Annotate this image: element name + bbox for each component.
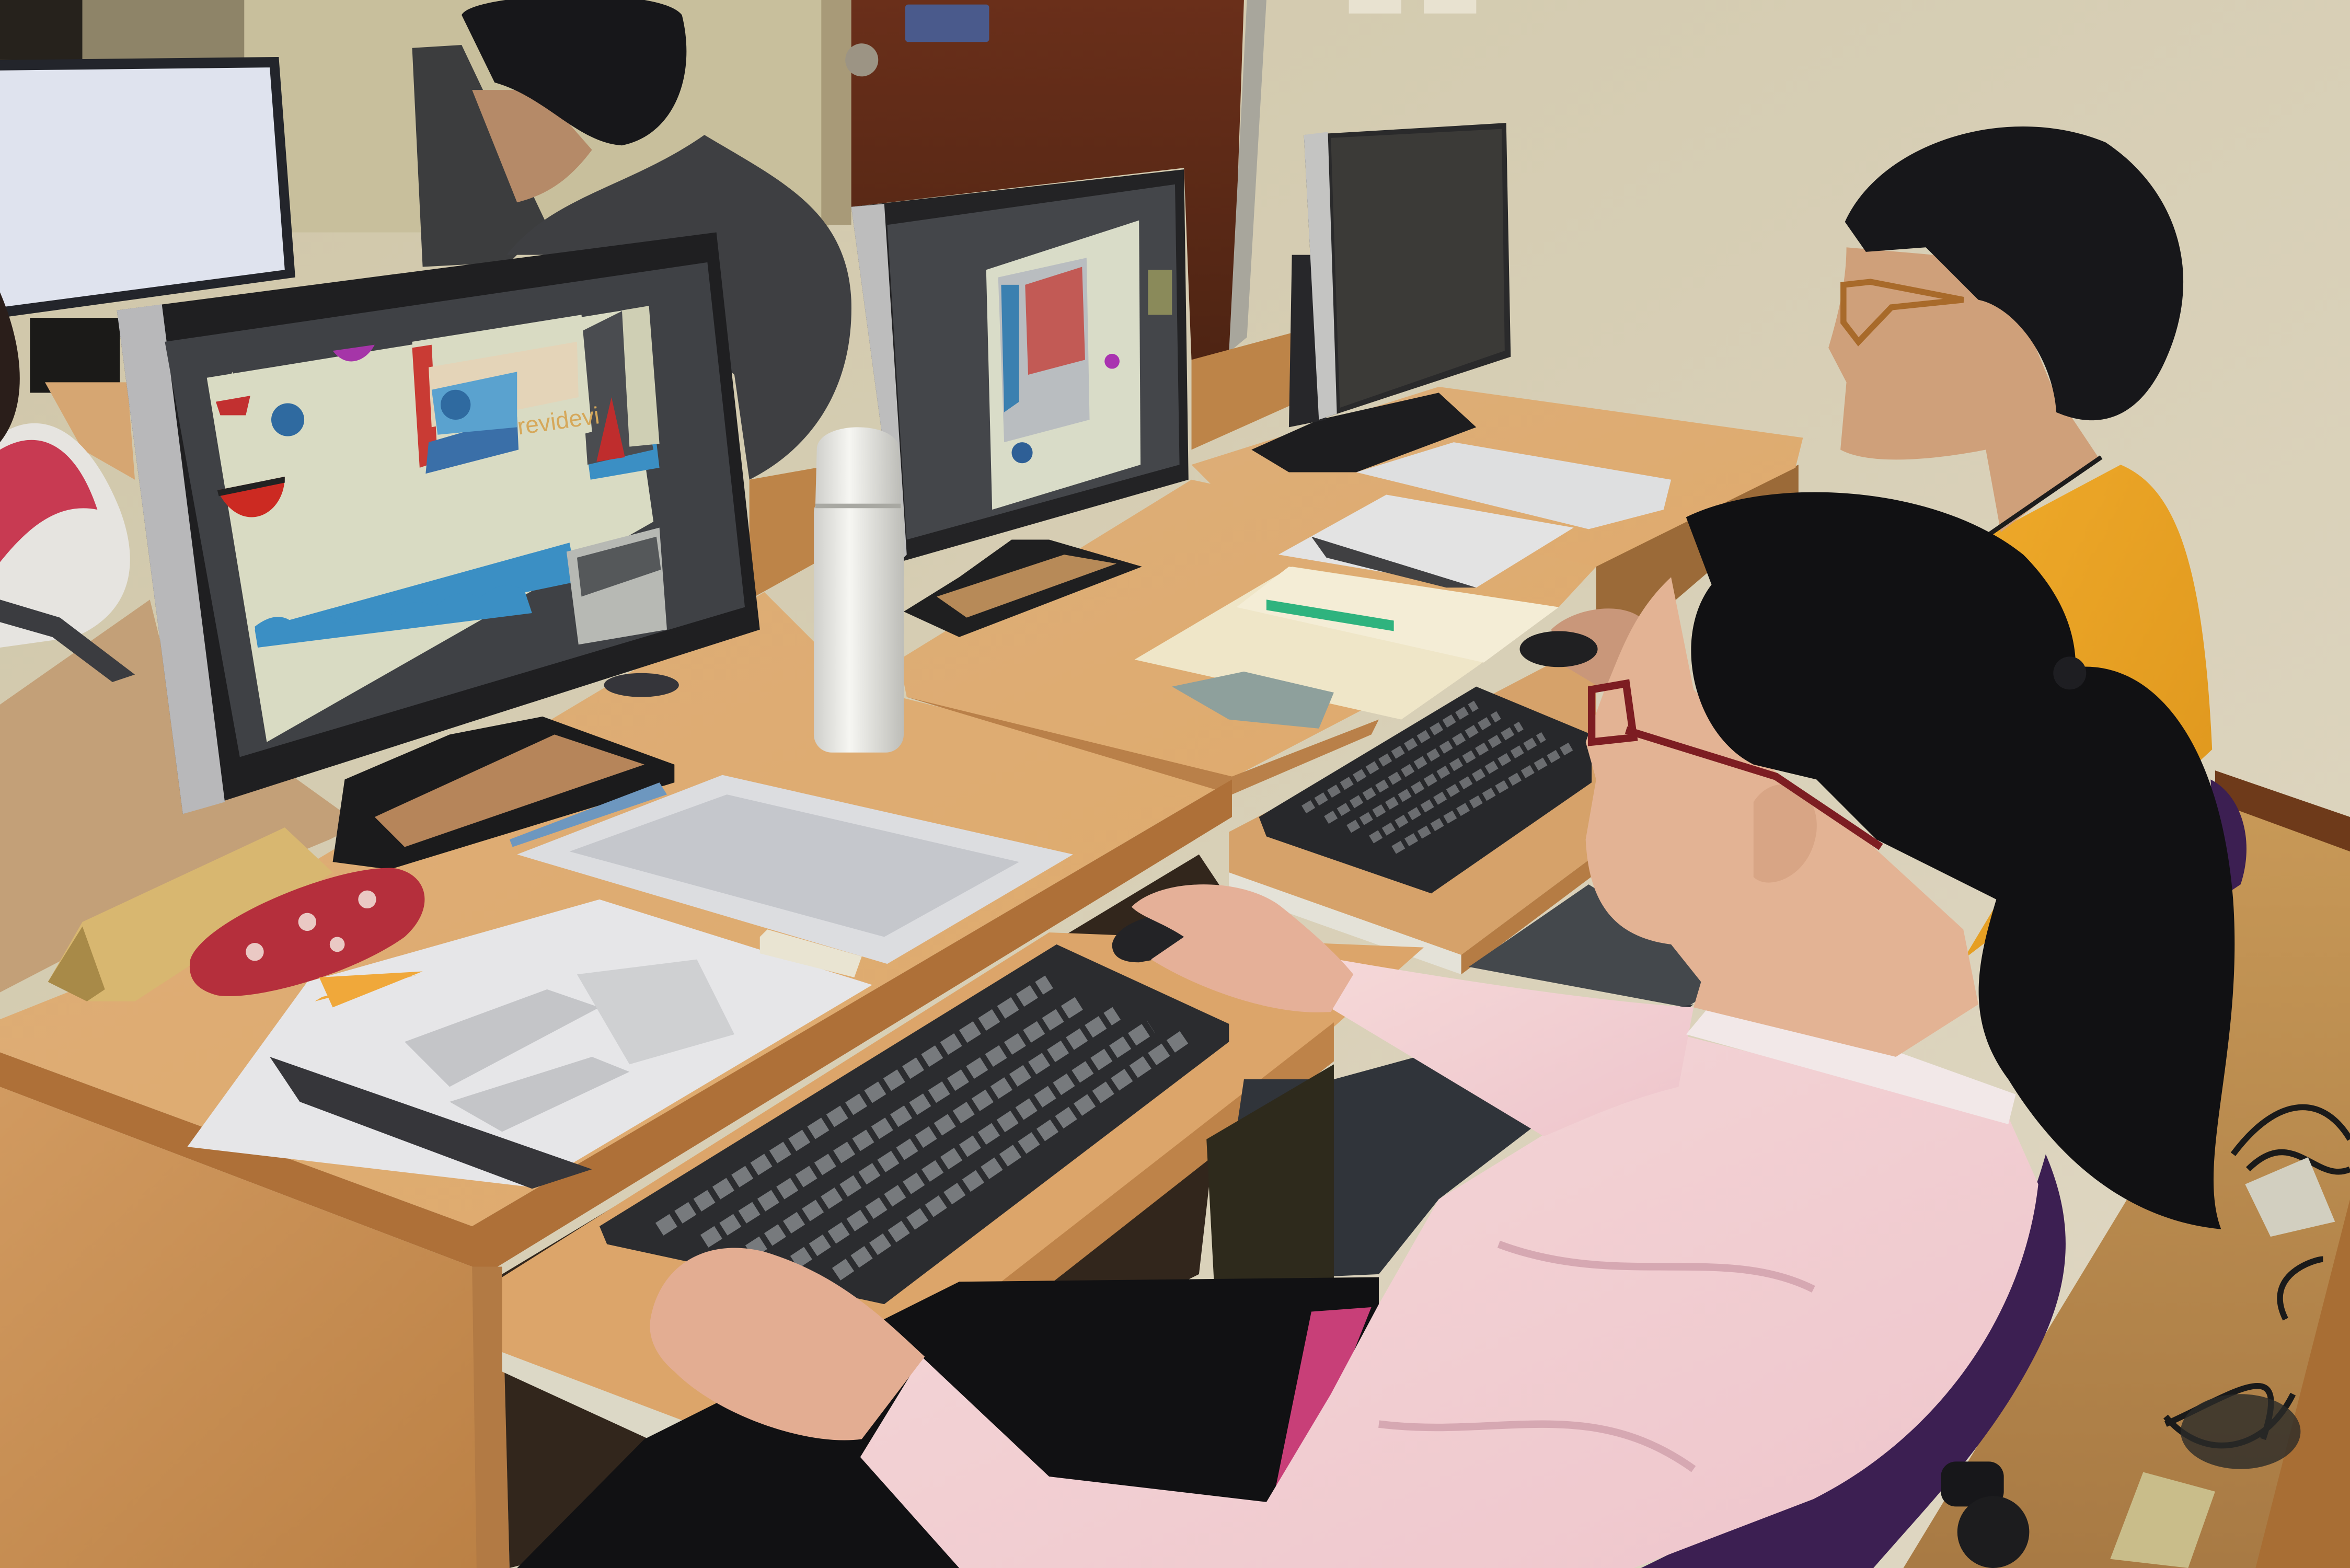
dark clothes under desk xyxy=(1206,884,1716,1289)
notebook with green pen xyxy=(1135,567,1559,729)
neck and face xyxy=(1586,577,1978,1057)
front desk panel xyxy=(0,779,1232,1568)
cables and power strips xyxy=(2110,1107,2350,1568)
keyboard: front xyxy=(600,944,1229,1304)
purple chair xyxy=(1641,779,2247,1568)
desk surfaces xyxy=(0,387,1803,1226)
hand on mouse xyxy=(1132,884,1353,1012)
red glasses case xyxy=(190,868,424,996)
monitor: right dark xyxy=(1251,123,1511,472)
floor and baseboard xyxy=(1904,770,2350,1568)
hair and ponytail xyxy=(1686,492,2234,1229)
sash xyxy=(1274,1307,1372,1496)
hair tie xyxy=(2053,656,2086,689)
hair xyxy=(1845,126,2183,420)
pencil case xyxy=(48,827,333,1001)
lanyard xyxy=(1986,457,2101,537)
keyboard: second xyxy=(1259,687,1592,893)
keyboard tray: second xyxy=(1229,660,1611,974)
monitor: top left xyxy=(0,57,295,480)
mouse xyxy=(1112,913,1224,962)
shirt folds xyxy=(1379,1244,1813,1469)
man in yellow shirt xyxy=(1519,126,2212,960)
keyboard tray: front xyxy=(502,932,1424,1499)
upper sleeve xyxy=(1329,960,1694,1136)
desk row: back panels xyxy=(750,333,1799,675)
papers on right desk xyxy=(1278,442,1671,587)
monitor: centre with artboard xyxy=(851,169,1189,637)
white collar xyxy=(1686,989,2016,1124)
back person in grey shirt xyxy=(412,0,851,480)
canvas with artwork xyxy=(207,306,667,742)
artboard on centre monitor xyxy=(986,221,1172,510)
artwork caption: revidevi xyxy=(515,401,601,440)
glue stick xyxy=(760,929,862,977)
hand on mouse xyxy=(1551,608,1645,689)
black trousers xyxy=(517,1277,1379,1568)
monitor: main with illustration app xyxy=(117,233,760,869)
woman xyxy=(517,492,2234,1568)
ear xyxy=(1754,785,1817,883)
thermos bottle xyxy=(814,427,904,753)
printed document stack xyxy=(187,775,1073,1189)
hand on keyboard xyxy=(650,1248,925,1440)
pen on desk xyxy=(510,782,667,847)
yellow shirt xyxy=(1963,465,2212,960)
pink shirt body and sleeves xyxy=(860,1034,2038,1568)
glasses xyxy=(1844,282,1963,342)
person at left edge and bag xyxy=(0,292,360,993)
face xyxy=(1828,247,2098,532)
red glasses xyxy=(1592,684,1881,847)
